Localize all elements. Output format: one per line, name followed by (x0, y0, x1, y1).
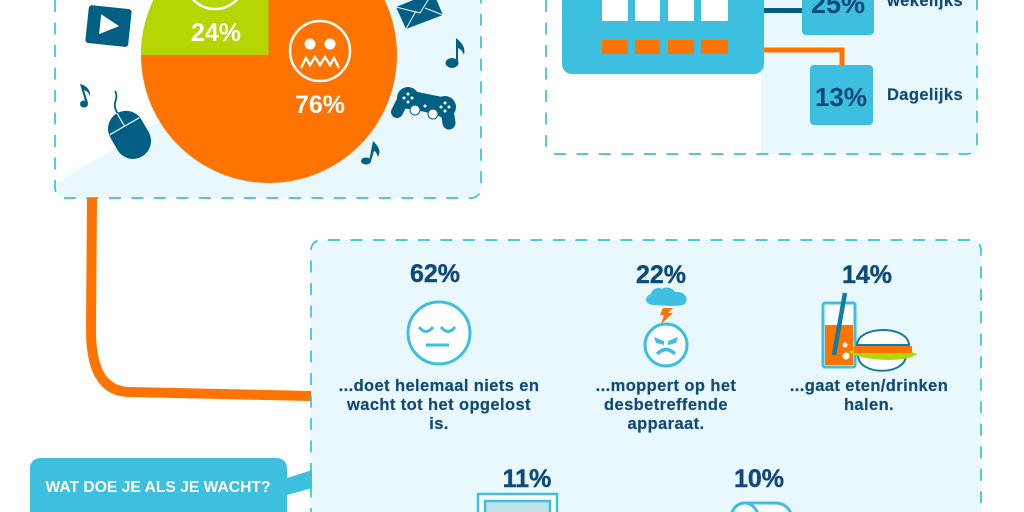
icon: computer mouse (101, 91, 158, 166)
icon: bored face (408, 302, 470, 364)
icon: video player (85, 5, 132, 47)
icon: game controller (397, 87, 456, 123)
label: 24%: 24% (191, 19, 241, 47)
stat: 13% (810, 65, 873, 125)
label: dagelijks: Dagelijks (887, 86, 963, 104)
label: 76%: 76% (295, 91, 345, 119)
icon: screen (478, 494, 557, 512)
icon: scared face (290, 21, 350, 81)
callout: what do you do while waiting: WAT DOE JE ALS JE WACHT? (46, 479, 270, 496)
stat: 25% (802, 0, 874, 35)
text: gets food: halen. (844, 396, 894, 414)
text: does nothing: ...doet helemaal niets en (339, 377, 539, 395)
stat: 10%: 10% (734, 465, 784, 493)
pie slice: orange 76% (141, 0, 397, 183)
text: does nothing: wacht tot het opgelost (346, 396, 531, 414)
icon: music note right (446, 38, 464, 68)
connector: daily (764, 50, 842, 66)
panel: what do you do while waiting (311, 240, 981, 512)
connector: weekly (764, 8, 804, 13)
machine (562, 0, 764, 74)
icon: angry face with cloud (645, 288, 687, 366)
text: grumbles: apparaat. (628, 415, 704, 433)
connector: orange line (91, 198, 311, 396)
stat: 13%: 13% (815, 82, 867, 112)
icon: music note bottom (361, 141, 379, 164)
icon: green smiley (185, 0, 245, 9)
text: gets food: ...gaat eten/drinken (790, 377, 948, 395)
text: does nothing: is. (429, 415, 449, 433)
text: grumbles: ...moppert op het (596, 377, 736, 395)
panel: frustration pie (55, 0, 481, 198)
pie slice: green 24% (141, 0, 269, 55)
stat: 22%: 22% (636, 261, 686, 289)
panel: frequency (546, 0, 977, 154)
icon: drink and burger (823, 293, 917, 371)
icon: toilet roll (730, 503, 793, 512)
callout: what do you do while waiting (30, 458, 312, 512)
stat: 62%: 62% (410, 260, 460, 288)
icon: envelope (396, 0, 443, 29)
text: grumbles: desbetreffende (604, 396, 728, 414)
stat: 11%: 11% (503, 465, 551, 493)
stat: 14%: 14% (842, 261, 892, 289)
icon: small music note (80, 84, 90, 108)
